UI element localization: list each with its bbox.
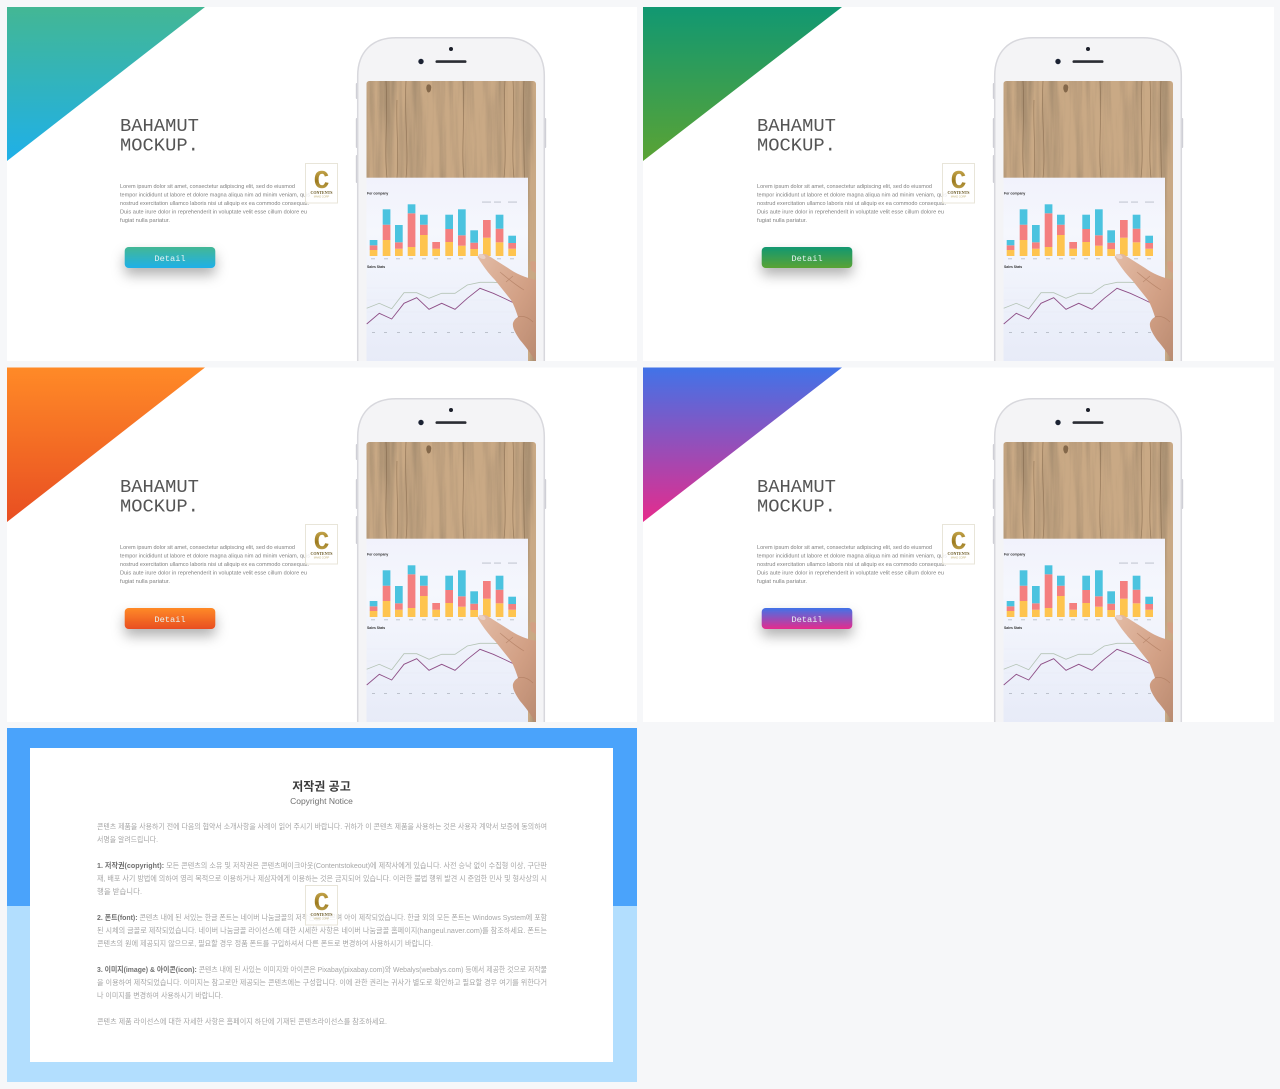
body text: Lorem ipsum dolor sit amet, consectetur adipiscing elit, sed do eiusmod [757, 184, 932, 190]
heading: BAHAMUT [757, 476, 836, 498]
heading: BAHAMUT [120, 476, 199, 498]
body text: nostrud exercitation ullamco laboris nisi ut aliquip ex ea commodo consequat. [757, 562, 946, 568]
body text: fugiat nulla pariatur. [757, 579, 807, 585]
clause 1: copyright: 재, 배포 사기 방법에 의하여 영리 목적으로 이용하거나 제삼자에게 이용하는 것은 금지되어 있습니다. 이러한 불법 행위 발견 시 준엄한 민사 및 형사상의 시 [97, 873, 547, 883]
body text: tempor incididunt ut labore et dolore magna aliqua nim ad minim veniam, quis [120, 554, 310, 560]
body text: Lorem ipsum dolor sit amet, consectetur adipiscing elit, sed do eiusmod [757, 545, 932, 551]
body text: nostrud exercitation ullamco laboris nisi ut aliquip ex ea commodo consequat. [120, 201, 309, 207]
body text [757, 545, 947, 585]
phone mockup with chart photo: Sales Stats [367, 265, 385, 269]
heading: BAHAMUT [120, 115, 199, 137]
body text: fugiat nulla pariatur. [757, 218, 807, 224]
clause 3: image and icon: 3. 이미지(image) & 아이콘(icon): 콘텐츠 내에 된 사있는 이미지와 아이콘은 Pixabay(pixabay.com)와 Webalys(webalys.com) 등에서 제공한 것으로 저작물 [97, 964, 547, 974]
body text: tempor incididunt ut labore et dolore magna aliqua nim ad minim veniam, quis [757, 192, 947, 198]
button: Detail: Detail [154, 615, 186, 625]
body text: tempor incididunt ut labore et dolore magna aliqua nim ad minim veniam, quis [120, 192, 310, 198]
body text [120, 545, 310, 585]
clause 2: font: 2. 폰트(font): 콘텐츠 내에 된 서있는 한글 폰트는 네이버 나눔글꼴의 저작권을 따르며 아이 제작되었습니다. 한글 외의 모든 폰트는 Windows System에 포함 [97, 912, 547, 922]
white notice card [30, 748, 613, 1062]
phone mockup with chart photo: Sales Stats [1004, 265, 1022, 269]
body text: nostrud exercitation ullamco laboris nisi ut aliquip ex ea commodo consequat. [757, 201, 946, 207]
body text: nostrud exercitation ullamco laboris nisi ut aliquip ex ea commodo consequat. [120, 562, 309, 568]
body text: Lorem ipsum dolor sit amet, consectetur adipiscing elit, sed do eiusmod [120, 184, 295, 190]
notice title: 저작권 공고 [292, 778, 351, 794]
clause 1: copyright: 1. 저작권(copyright): 모든 콘텐츠의 소유 및 저작권은 콘텐츠메이크아웃(Contentstokeout)에 제작사에게 있습니다. 사전 승낙 없이 수집형 이상, 구단판 [97, 860, 547, 870]
body text: Duis aute irure dolor in reprehenderit in voluptate velit esse cillum dolore eu [757, 570, 944, 576]
phone mockup with chart photo [993, 399, 1183, 741]
phone mockup with chart photo: Sales Stats [367, 626, 385, 630]
light blue lower band [7, 906, 637, 1082]
body text: Duis aute irure dolor in reprehenderit in voluptate velit esse cillum dolore eu [120, 210, 307, 216]
clause 3: image and icon: 나 이미지를 변경하여 사용하시기 바랍니다. [97, 990, 223, 1000]
phone mockup with chart photo [356, 399, 546, 741]
button: Detail [762, 247, 852, 268]
panel: purple slide [643, 368, 1274, 741]
clause 1: copyright [97, 860, 547, 896]
phone mockup with chart photo: For company [367, 192, 388, 196]
button: Detail [125, 247, 215, 268]
heading: BAHAMUT [757, 115, 836, 137]
phone mockup with chart photo [356, 38, 546, 380]
phone mockup with chart photo: For company [1004, 192, 1025, 196]
notice subtitle: Copyright Notice [290, 796, 353, 806]
clause 2: font [97, 912, 547, 948]
phone mockup with chart photo: For company [1004, 552, 1025, 556]
body text: fugiat nulla pariatur. [120, 579, 170, 585]
slide background [7, 368, 637, 722]
panel: copyright notice [7, 728, 637, 1082]
decorative gradient triangle [7, 368, 205, 522]
clause 2: font: 콘텐츠의 원에 제공되지 않으므로, 필요할 경우 정품 폰트를 구입하셔서 다른 폰트로 변경하여 사용하시기 바랍니다. [97, 938, 433, 948]
watermark logo [942, 164, 974, 203]
phone mockup with chart photo [993, 38, 1183, 380]
body text: Lorem ipsum dolor sit amet, consectetur adipiscing elit, sed do eiusmod [120, 545, 295, 551]
body text [120, 184, 310, 224]
body text: fugiat nulla pariatur. [120, 218, 170, 224]
watermark logo [306, 886, 338, 925]
decorative gradient triangle [7, 7, 205, 161]
button: Detail: Detail [791, 615, 823, 625]
phone mockup with chart photo: Sales Stats [1004, 626, 1022, 630]
heading: MOCKUP. [757, 496, 836, 518]
panel: teal slide [7, 7, 637, 380]
slide background [7, 7, 637, 361]
intro paragraph [97, 821, 547, 844]
heading: MOCKUP. [120, 134, 199, 156]
body text [757, 184, 947, 224]
intro paragraph: 콘텐츠 제품을 사용하기 전에 다음의 협약서 소개사항을 사례이 읽어 주시기 바랍니다. 귀하가 이 콘텐츠 제품을 사용하는 것은 사용자 계약서 보증에 동의하여 [97, 821, 547, 831]
button: Detail: Detail [154, 254, 186, 264]
button: Detail [125, 608, 215, 629]
clause 1: copyright: 행을 받습니다. [97, 886, 142, 896]
blue upper band [7, 728, 637, 906]
phone mockup with chart photo: For company [367, 552, 388, 556]
closing line: 콘텐츠 제품 라이선스에 대한 자세한 사항은 홈페이지 하단에 기재된 콘텐츠라이선스를 참조하세요. [97, 1016, 387, 1026]
clause 2: font: 된 시체의 글꼴로 제작되었습니다. 네이버 나눔글꼴 라이선스에 대한 시세한 사항은 네이버 나눔글꼴 홈페이지(hangeul.naver.com)를 참조하세요. 폰트는 [97, 925, 547, 935]
slide background [643, 7, 1274, 361]
clause 3: image and icon [97, 964, 547, 1000]
decorative gradient triangle [643, 368, 842, 522]
heading: MOCKUP. [120, 496, 199, 518]
heading: MOCKUP. [757, 134, 836, 156]
slide background [643, 368, 1274, 722]
body text: tempor incididunt ut labore et dolore magna aliqua nim ad minim veniam, quis [757, 554, 947, 560]
intro paragraph: 서명을 알려드립니다. [97, 834, 158, 844]
body text: Duis aute irure dolor in reprehenderit in voluptate velit esse cillum dolore eu [120, 570, 307, 576]
button: Detail [762, 608, 852, 629]
watermark logo [942, 524, 974, 564]
watermark logo [306, 524, 338, 564]
watermark logo [306, 164, 338, 203]
button: Detail: Detail [791, 254, 823, 264]
panel: green slide [643, 7, 1274, 380]
clause 3: image and icon: 을 이용하여 제작되었습니다. 이미지는 참고로만 제공되는 콘텐츠에는 구성합니다. 이에 관한 권리는 귀사가 별도로 확인하고 필요할 경우 여기를 위한다거 [97, 977, 547, 987]
panel: orange slide [7, 368, 637, 741]
body text: Duis aute irure dolor in reprehenderit in voluptate velit esse cillum dolore eu [757, 210, 944, 216]
decorative gradient triangle [643, 7, 842, 161]
